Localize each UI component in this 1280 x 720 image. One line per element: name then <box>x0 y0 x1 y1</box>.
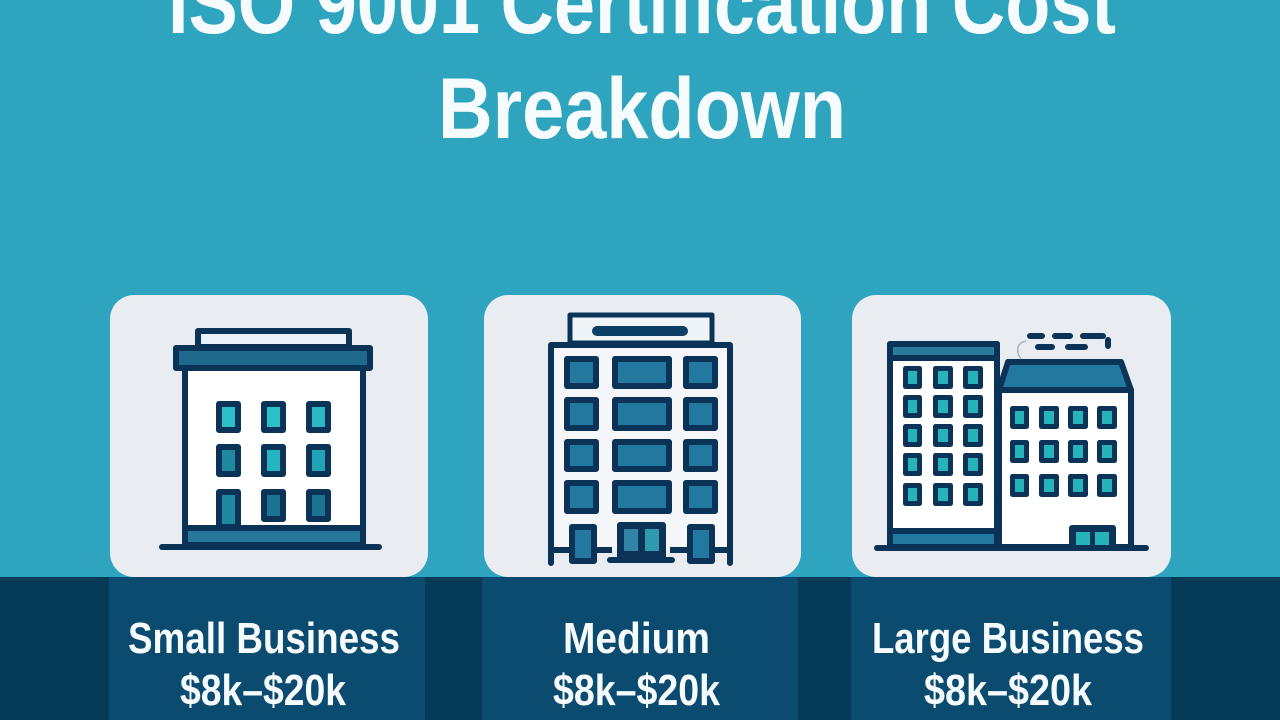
footer band <box>0 577 1280 720</box>
label: medium: $8k–$20k <box>553 666 720 715</box>
label: large business: Large Business <box>872 614 1144 663</box>
card background <box>852 295 1171 577</box>
label: large business: $8k–$20k <box>924 666 1092 715</box>
label: medium: Medium <box>563 614 710 663</box>
icon: medium office tower <box>551 315 730 563</box>
title: Breakdown <box>438 61 846 157</box>
panel: medium business <box>484 295 801 577</box>
label: small business <box>128 614 400 715</box>
icon: large office complex <box>877 336 1146 548</box>
label: large business <box>872 614 1144 715</box>
label: small business: $8k–$20k <box>180 666 346 715</box>
card background <box>110 295 428 577</box>
card background <box>484 295 801 577</box>
label: medium <box>553 614 720 715</box>
panel: small business <box>110 295 428 577</box>
title <box>168 0 1116 157</box>
panel: large business <box>852 295 1171 577</box>
label: small business: Small Business <box>128 614 400 663</box>
icon: small office building <box>162 331 379 547</box>
